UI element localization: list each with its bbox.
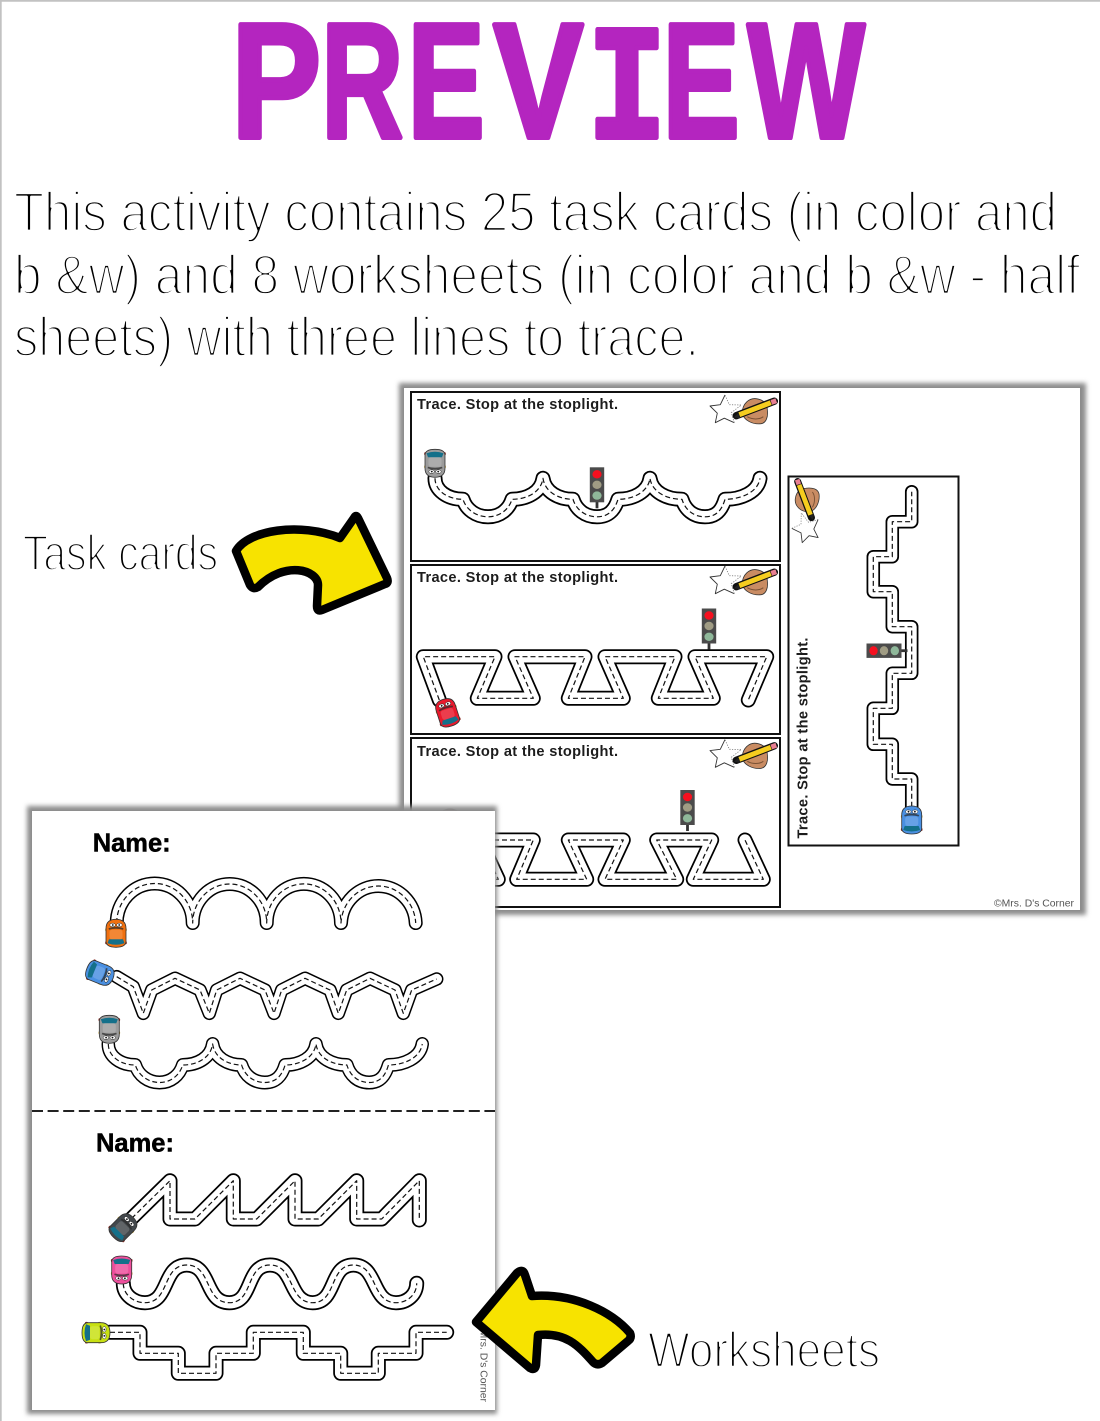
road: arches xyxy=(117,883,416,923)
card 3 hidden car xyxy=(439,809,461,837)
vertical card blue car xyxy=(901,806,922,834)
card 3 road xyxy=(430,840,763,879)
vertical card star and hand icon xyxy=(792,480,819,543)
top worksheet name label: Name: xyxy=(93,828,171,858)
gray car xyxy=(98,1015,120,1043)
card 2 instruction: Trace. Stop at the stoplight. xyxy=(417,570,618,586)
blue car xyxy=(83,958,117,989)
card 2 stoplight xyxy=(702,608,716,650)
road: zigzag xyxy=(117,977,437,1013)
card 3 star and hand icon xyxy=(710,740,776,768)
dashed cut line xyxy=(32,1110,495,1112)
worksheet sheet background xyxy=(32,811,495,1410)
worksheet sheet shadow xyxy=(27,806,497,1414)
card 1 xyxy=(411,392,780,561)
card 2 star and hand icon xyxy=(710,566,776,595)
intro text block: sheets) with three lines to trace. xyxy=(14,305,699,368)
worksheet copyright: ©Mrs. D's Corner xyxy=(478,1322,490,1402)
title xyxy=(231,0,865,188)
yellow car xyxy=(82,1322,110,1344)
card 2 road xyxy=(423,657,767,700)
bottom worksheet name label: Name: xyxy=(96,1128,174,1158)
task cards copyright: ©Mrs. D's Corner xyxy=(994,898,1074,910)
card 1 gray car xyxy=(424,449,446,477)
title: I xyxy=(587,2,667,188)
vertical card stoplight xyxy=(866,644,908,658)
panel: worksheets xyxy=(27,806,497,1414)
card 2 red car xyxy=(433,696,462,729)
card 3 instruction: Trace. Stop at the stoplight. xyxy=(417,744,618,760)
road: scallops xyxy=(108,1044,422,1082)
orange car xyxy=(105,919,127,947)
road: slanted teeth xyxy=(132,1181,419,1220)
vertical card road xyxy=(873,492,912,807)
card 2 xyxy=(411,565,780,734)
task cards sheet shadow xyxy=(399,383,1086,915)
dark car xyxy=(106,1210,141,1245)
road: waves xyxy=(123,1265,417,1303)
label: worksheets: Worksheets xyxy=(648,1322,880,1378)
vertical card xyxy=(788,476,958,846)
road: steps xyxy=(110,1332,447,1373)
label: task cards: Task cards xyxy=(23,525,218,581)
card 1 road xyxy=(435,478,760,517)
card 3 stoplight xyxy=(680,790,695,831)
card 1 instruction: Trace. Stop at the stoplight. xyxy=(417,397,618,413)
arrow: to task cards xyxy=(236,516,388,610)
vertical card instruction: Trace. Stop at the stoplight. xyxy=(796,638,812,838)
task cards sheet background xyxy=(404,388,1080,910)
pink car xyxy=(111,1256,132,1284)
arrow: to worksheets xyxy=(476,1271,631,1369)
card 1 star and hand icon xyxy=(710,395,776,424)
panel: task cards xyxy=(399,383,1086,915)
card 1 stoplight xyxy=(590,467,604,508)
card 3 xyxy=(411,738,780,907)
intro text block xyxy=(14,180,1080,368)
